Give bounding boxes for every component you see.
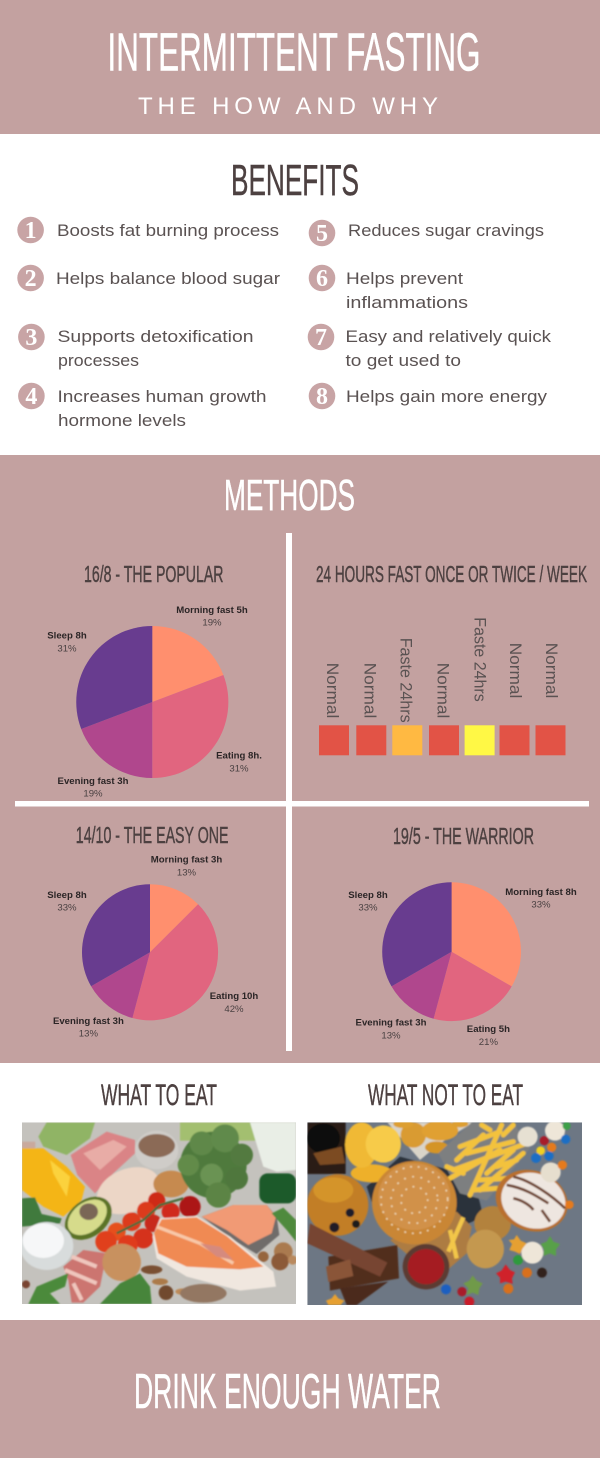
day labels: Normal bbox=[506, 643, 524, 698]
benefit 3: Supports detoxification bbox=[58, 327, 253, 346]
benefit 6 bbox=[309, 265, 468, 312]
method title: 16/8 - THE POPULAR bbox=[84, 561, 224, 587]
benefit 2: 2 bbox=[25, 266, 37, 292]
benefit 3: processes bbox=[58, 351, 139, 370]
method: 16/8 bbox=[47, 561, 262, 800]
benefit 4: hormone levels bbox=[58, 411, 186, 430]
photo: junk food bbox=[307, 1120, 582, 1307]
pie labels: 33% bbox=[57, 903, 77, 914]
day labels: Normal bbox=[361, 663, 379, 718]
panel: methods bbox=[0, 455, 600, 1063]
pie labels bbox=[47, 605, 262, 800]
pie labels: 19% bbox=[83, 789, 103, 800]
benefit 8: Helps gain more energy bbox=[346, 387, 548, 406]
pie labels: Sleep 8h bbox=[47, 631, 87, 642]
pie labels bbox=[47, 855, 258, 1040]
photo: healthy food bbox=[20, 1122, 297, 1304]
panel: header bbox=[0, 0, 600, 134]
pie labels: 13% bbox=[177, 867, 197, 878]
pie labels: 19% bbox=[202, 618, 222, 629]
benefit 1: Boosts fat burning process bbox=[57, 221, 279, 240]
method: 14/10 bbox=[47, 822, 258, 1040]
benefit 7 bbox=[308, 324, 552, 370]
pie labels: Morning fast 3h bbox=[151, 855, 222, 866]
benefit 7: 7 bbox=[315, 325, 327, 351]
benefit 5: 5 bbox=[316, 221, 328, 247]
pie labels: Eating 10h bbox=[210, 991, 258, 1002]
day labels: Faste 24hrs bbox=[396, 638, 414, 723]
benefit 4: 4 bbox=[25, 384, 37, 410]
pie labels: 33% bbox=[358, 903, 378, 914]
benefit 2: Helps balance blood sugar bbox=[56, 269, 280, 288]
pie labels: 42% bbox=[224, 1004, 244, 1015]
pie labels: Evening fast 3h bbox=[53, 1016, 124, 1027]
pie chart: 14/10 bbox=[82, 884, 218, 1020]
pie labels: Evening fast 3h bbox=[356, 1018, 427, 1029]
benefit 4: Increases human growth bbox=[58, 387, 266, 406]
pie labels: 31% bbox=[57, 643, 77, 654]
pie labels: Morning fast 5h bbox=[176, 605, 248, 616]
benefit 6: Helps prevent bbox=[346, 269, 463, 288]
pie chart: 19/5 bbox=[382, 882, 521, 1021]
heading: benefits: BENEFITS bbox=[231, 156, 359, 205]
day labels: Normal bbox=[434, 663, 452, 718]
benefit 5: Reduces sugar cravings bbox=[348, 221, 544, 240]
pie labels: Evening fast 3h bbox=[58, 776, 129, 787]
pie labels: Sleep 8h bbox=[348, 890, 388, 901]
benefit 3 bbox=[18, 324, 253, 370]
benefit 1: 1 bbox=[25, 218, 37, 244]
pie labels bbox=[348, 887, 577, 1048]
method title: 14/10 - THE EASY ONE bbox=[76, 822, 228, 848]
pie labels: 21% bbox=[479, 1037, 498, 1048]
benefit 2 bbox=[17, 265, 280, 292]
day labels: Faste 24hrs bbox=[470, 617, 488, 702]
panel: footer bbox=[0, 1320, 600, 1458]
heading: methods: METHODS bbox=[224, 471, 355, 520]
benefit 1 bbox=[17, 217, 279, 244]
benefit 6: 6 bbox=[316, 266, 328, 292]
benefit 3: 3 bbox=[25, 325, 37, 351]
benefit 5 bbox=[309, 220, 544, 247]
subtitle: THE HOW AND WHY bbox=[138, 93, 438, 120]
day labels: Normal bbox=[323, 663, 341, 718]
benefit 8: 8 bbox=[316, 384, 328, 410]
benefit 7: Easy and relatively quick bbox=[346, 327, 552, 346]
pie labels: 13% bbox=[79, 1029, 98, 1040]
pie labels: Eating 5h bbox=[467, 1024, 510, 1035]
method: 19/5 bbox=[348, 823, 577, 1048]
panel: benefits bbox=[17, 156, 552, 430]
day labels bbox=[323, 617, 560, 723]
pie labels: 31% bbox=[229, 763, 249, 774]
benefit 7: to get used to bbox=[346, 351, 461, 370]
day labels: Normal bbox=[542, 643, 560, 698]
benefit 4 bbox=[18, 383, 266, 430]
heading: what to eat: WHAT TO EAT bbox=[101, 1079, 217, 1112]
day squares bbox=[319, 725, 566, 755]
pie labels: 33% bbox=[531, 900, 551, 911]
pie labels: 13% bbox=[381, 1030, 401, 1041]
benefit 8 bbox=[309, 383, 548, 410]
pie labels: Eating 8h. bbox=[216, 751, 262, 762]
pie labels: Sleep 8h bbox=[47, 890, 87, 901]
benefit 6: inflammations bbox=[346, 293, 468, 312]
pie chart: 16/8 bbox=[76, 626, 228, 778]
method: 24 hours bbox=[316, 561, 587, 755]
pie labels: Morning fast 8h bbox=[505, 887, 577, 898]
